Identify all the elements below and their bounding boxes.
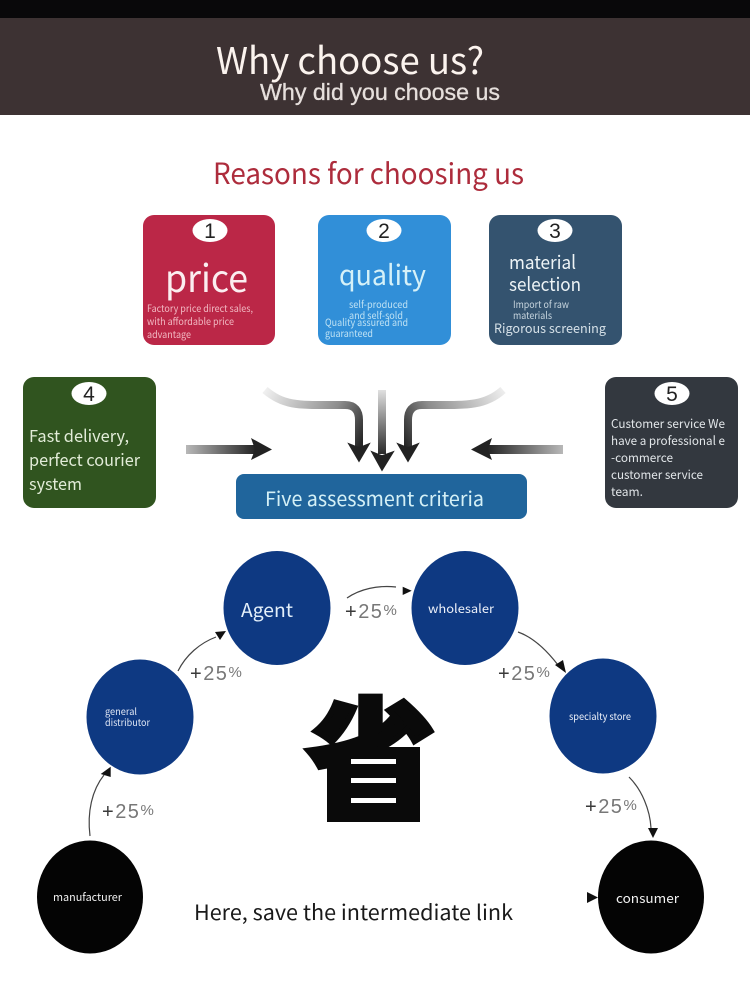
price description: with affordable price <box>147 313 234 328</box>
quality description <box>325 296 408 340</box>
label: +25% fourth: +25 <box>498 663 536 685</box>
label: +25% first: +25 <box>102 801 140 823</box>
node: consumer <box>598 840 704 954</box>
material description <box>513 296 569 322</box>
material description: Import of raw <box>513 296 569 311</box>
node: specialty store: specialty store <box>569 708 631 723</box>
heading: reasons: Reasons for choosing us <box>213 151 524 193</box>
node: general distributor <box>86 660 194 774</box>
price title: price <box>165 248 248 303</box>
service text: customer service <box>611 466 703 483</box>
node: wholesaler <box>412 551 518 665</box>
label: +25% fifth: +25 <box>585 796 623 818</box>
quality title: quality <box>339 254 426 294</box>
node: general distributor: general <box>105 704 137 718</box>
badge 4: 4 <box>83 383 95 406</box>
subtitle: Why did you choose us <box>260 79 500 105</box>
badge 3: 3 <box>549 220 561 243</box>
quality description: and self-sold <box>349 307 403 322</box>
panel: material selection <box>489 215 622 345</box>
caption: save the intermediate link: Here, save the intermediate link <box>194 897 513 927</box>
arrow: curved left <box>265 390 369 461</box>
badge 2: 2 <box>378 220 390 243</box>
label: +25% fifth: % <box>623 797 638 814</box>
node: agent <box>224 551 330 665</box>
arrow: distributor to agent <box>178 631 226 671</box>
node: specialty store <box>550 658 656 774</box>
label: +25% third: % <box>383 602 398 619</box>
delivery text: system <box>29 471 82 495</box>
panel: fast delivery <box>23 377 156 508</box>
arrow: left horizontal <box>186 438 272 460</box>
banner: five assessment criteria: Five assessment criteria <box>265 483 484 512</box>
service text <box>611 415 725 500</box>
panel: price <box>143 215 275 345</box>
material screening: Rigorous screening <box>494 318 607 337</box>
arrow: wholesaler to specialty store <box>518 632 566 673</box>
arrow: agent to wholesaler <box>347 586 412 598</box>
title: Why choose us? <box>216 31 484 85</box>
node: manufacturer: manufacturer <box>53 889 123 905</box>
quality description: Quality assured and <box>325 314 408 329</box>
label: +25% second: +25 <box>190 663 228 685</box>
header band <box>0 0 750 115</box>
service text: -commerce <box>611 449 673 466</box>
material description: materials <box>513 307 552 322</box>
service text: Customer service We <box>611 415 725 432</box>
banner: five assessment criteria <box>236 474 527 519</box>
delivery text <box>29 423 141 495</box>
delivery text: Fast delivery, <box>29 423 129 447</box>
material title <box>509 249 581 297</box>
quality description: guaranteed <box>325 325 373 340</box>
delivery text: perfect courier <box>29 447 141 471</box>
node: consumer: consumer <box>616 888 680 907</box>
label: +25% first: % <box>140 802 155 819</box>
panel: customer service <box>605 377 738 508</box>
arrow: center down <box>372 390 393 470</box>
service text: team. <box>611 483 643 500</box>
node: wholesaler: wholesaler <box>428 600 494 617</box>
large character: save: 省 <box>307 658 435 843</box>
quality description: self-produced <box>349 296 408 311</box>
arrow: manufacturer to distributor <box>89 767 111 836</box>
badge 5: 5 <box>666 383 678 406</box>
arrow: right horizontal <box>471 438 563 460</box>
label: +25% second: % <box>228 664 243 681</box>
price description <box>147 300 253 341</box>
node: manufacturer <box>37 840 143 954</box>
panel: quality <box>318 215 451 345</box>
arrow: into consumer <box>587 892 598 903</box>
price description: Factory price direct sales, <box>147 300 253 315</box>
service text: have a professional e <box>611 432 725 449</box>
label: +25% fourth: % <box>536 664 551 681</box>
node: general distributor: distributor <box>105 715 150 729</box>
badge 1: 1 <box>204 220 216 243</box>
arrow: specialty store to consumer <box>629 777 658 838</box>
node: agent: Agent <box>241 596 293 623</box>
label: +25% third: +25 <box>345 601 383 623</box>
material title: selection <box>509 271 581 297</box>
arrow: curved right <box>398 390 503 461</box>
material title: material <box>509 249 576 275</box>
price description: advantage <box>147 326 191 341</box>
